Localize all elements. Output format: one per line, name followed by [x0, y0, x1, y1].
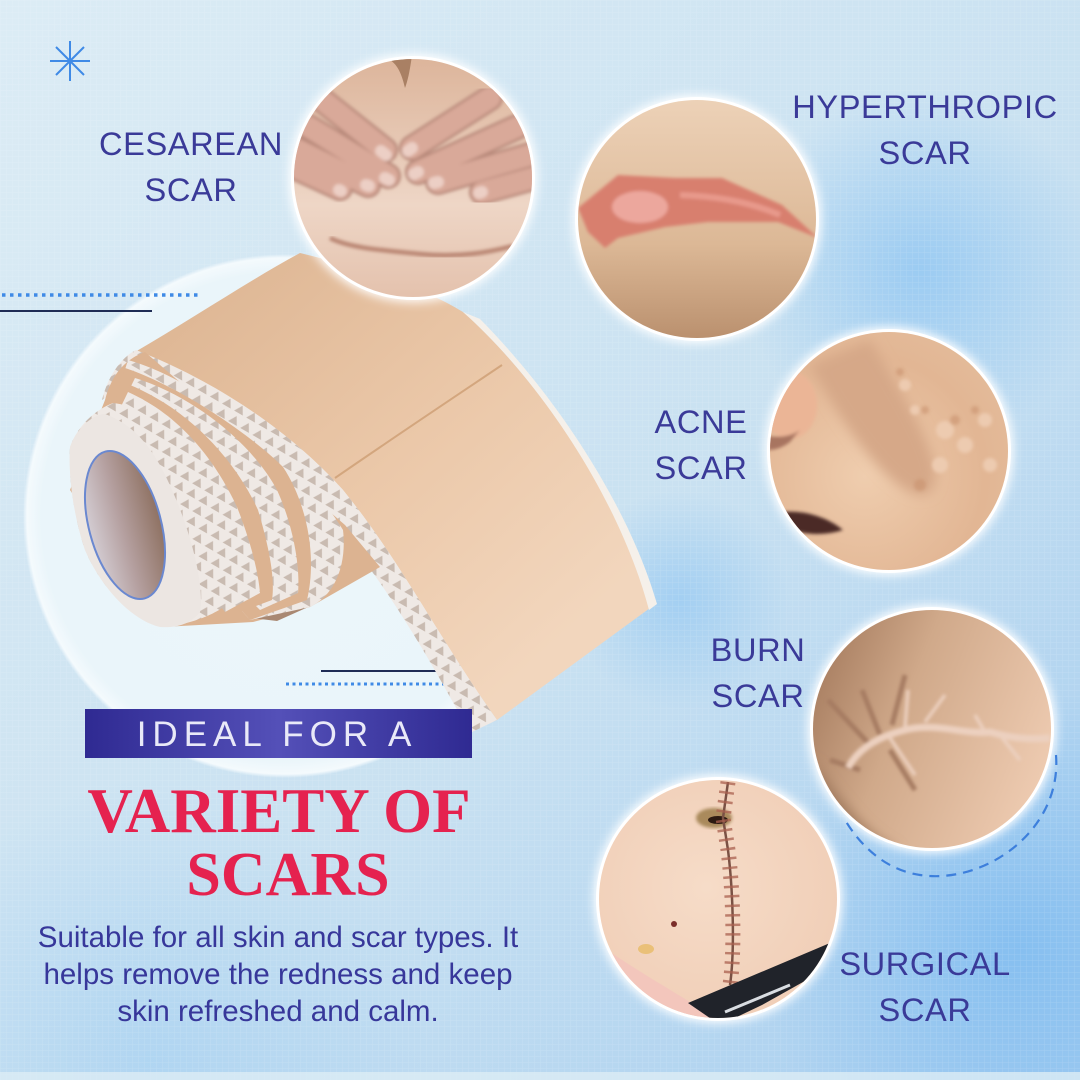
- dashed arc under burn photo: [845, 755, 1056, 876]
- label: surgical scar: SURGICAL: [839, 945, 1011, 982]
- photo: hyperthropic scar: [573, 95, 821, 343]
- coil gap 3: [100, 385, 273, 612]
- label: acne scar: SCAR: [655, 449, 747, 486]
- coil layer 1: [70, 403, 233, 627]
- roll front white ring: [70, 414, 201, 627]
- label: acne scar: ACNE: [655, 403, 747, 440]
- banner: ideal for a: [85, 709, 472, 758]
- coil underside shadow: [252, 588, 313, 621]
- photo: surgical scar: [594, 775, 842, 1025]
- decorative backdrop circle: [23, 254, 547, 778]
- dotted line and rule, lower centre: [286, 671, 460, 684]
- body text: Suitable for all skin and scar types. It: [38, 921, 518, 954]
- coil layer 2: [100, 392, 260, 612]
- heading: variety of scars: VARIETY OF: [87, 776, 471, 846]
- label: hyperthropic scar: SCAR: [879, 134, 971, 171]
- photo: cesarean scar: [289, 54, 540, 305]
- heading: variety of scars: [87, 776, 471, 909]
- label: cesarean scar: CESAREAN: [99, 125, 283, 162]
- tape seam: [335, 365, 502, 478]
- photo: burn scar: [808, 605, 1056, 853]
- heading: variety of scars: SCARS: [186, 841, 390, 909]
- roll centre hole: [71, 442, 179, 608]
- label: cesarean scar: SCAR: [145, 171, 237, 208]
- tape right translucent edge: [463, 312, 657, 610]
- coil layer 3: [100, 378, 298, 610]
- product: silicone scar tape roll: [70, 253, 657, 733]
- body text: [38, 921, 518, 1028]
- dotted line and rule, upper left: [0, 295, 200, 311]
- label: burn scar: BURN: [711, 631, 805, 668]
- banner: ideal for a: IDEAL FOR A: [137, 715, 417, 754]
- label: burn scar: SCAR: [712, 677, 804, 714]
- coil gap 4: [100, 368, 311, 620]
- tape strip: [135, 253, 650, 720]
- body text: skin refreshed and calm.: [117, 995, 439, 1028]
- tape textured selvedge: [102, 350, 497, 733]
- label: surgical scar: SCAR: [879, 991, 971, 1028]
- coil base: [70, 352, 380, 627]
- label: hyperthropic scar: HYPERTHROPIC: [792, 88, 1058, 125]
- icon: sparkle: [50, 41, 90, 81]
- photo: acne scar: [763, 327, 1013, 575]
- body text: helps remove the redness and keep: [43, 958, 513, 991]
- coil layer 4: [100, 360, 344, 620]
